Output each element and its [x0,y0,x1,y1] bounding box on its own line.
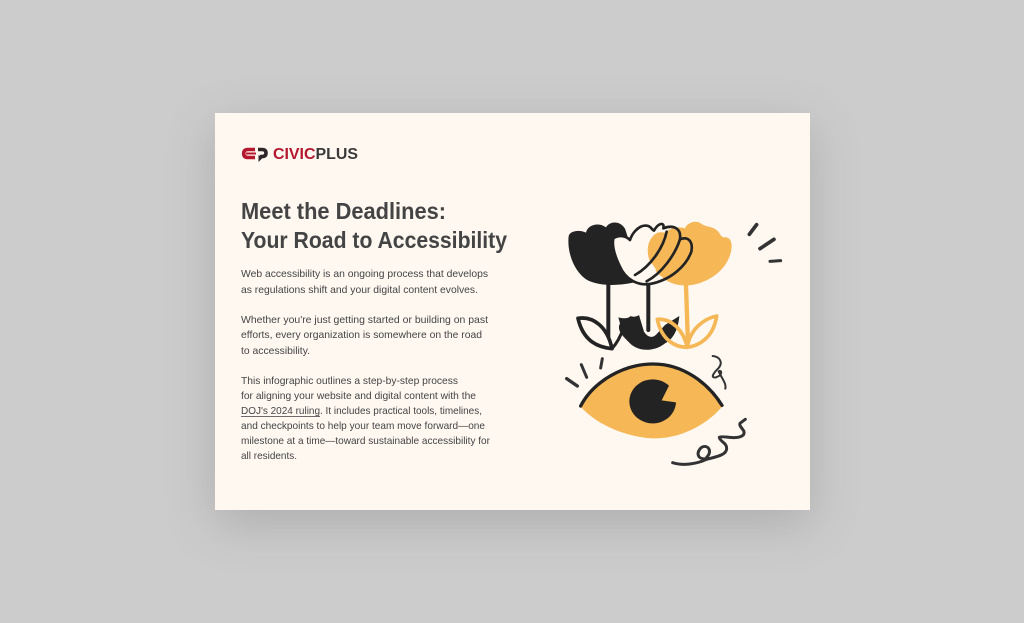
logo: CivicPlus [244,146,358,163]
panel: card [215,113,810,510]
white petal fill [613,226,660,283]
text block: second paragraph: Whether you're just getting started or building on past [241,315,488,326]
petal lines [635,232,680,281]
text block: third paragraph: DOJ's 2024 ruling. It includes practical tools, timelines, [241,406,482,417]
eye shape [580,364,723,438]
text block: third paragraph: milestone at a time—toward sustainable accessibility for [241,436,491,447]
text block: third paragraph: all residents. [241,451,297,462]
icon: white outlined tulip [613,224,692,350]
orange leaf overlap [657,319,687,347]
heading [241,198,507,253]
black leaf blob [618,315,679,350]
text block: third paragraph: This infographic outlines a step-by-step process [241,376,458,387]
pupil [629,379,676,423]
text block: second paragraph: to accessibility. [241,346,310,357]
text block: intro paragraph: as regulations shift and your digital content evolves. [241,285,478,296]
text block: second paragraph [241,315,488,357]
icon: CP logo mark [244,150,266,162]
text block: intro paragraph: Web accessibility is an ongoing process that develops [241,269,488,280]
text block: second paragraph: efforts, every organization is somewhere on the road [241,330,482,341]
tulip outline [613,224,692,284]
eyelashes [567,359,602,386]
illustration: tulips [568,222,781,350]
icon: black tulip [568,223,633,349]
heading: Your Road to Accessibility [241,227,507,253]
upper eyelid [581,364,722,406]
heading: Meet the Deadlines: [241,198,446,224]
text block: third paragraph [241,376,491,462]
icon: orange tulip [646,222,732,347]
logo wordmark: CIVICPLUS [273,146,358,163]
text block: third paragraph: for aligning your website and digital content with the [241,391,476,402]
icon: eye [567,356,745,464]
large squiggle [673,419,745,464]
icon: spark lines [749,225,781,261]
text block: third paragraph: and checkpoints to help your team move forward—one [241,421,485,432]
text block: intro paragraph [241,269,488,296]
small squiggle [713,356,726,389]
